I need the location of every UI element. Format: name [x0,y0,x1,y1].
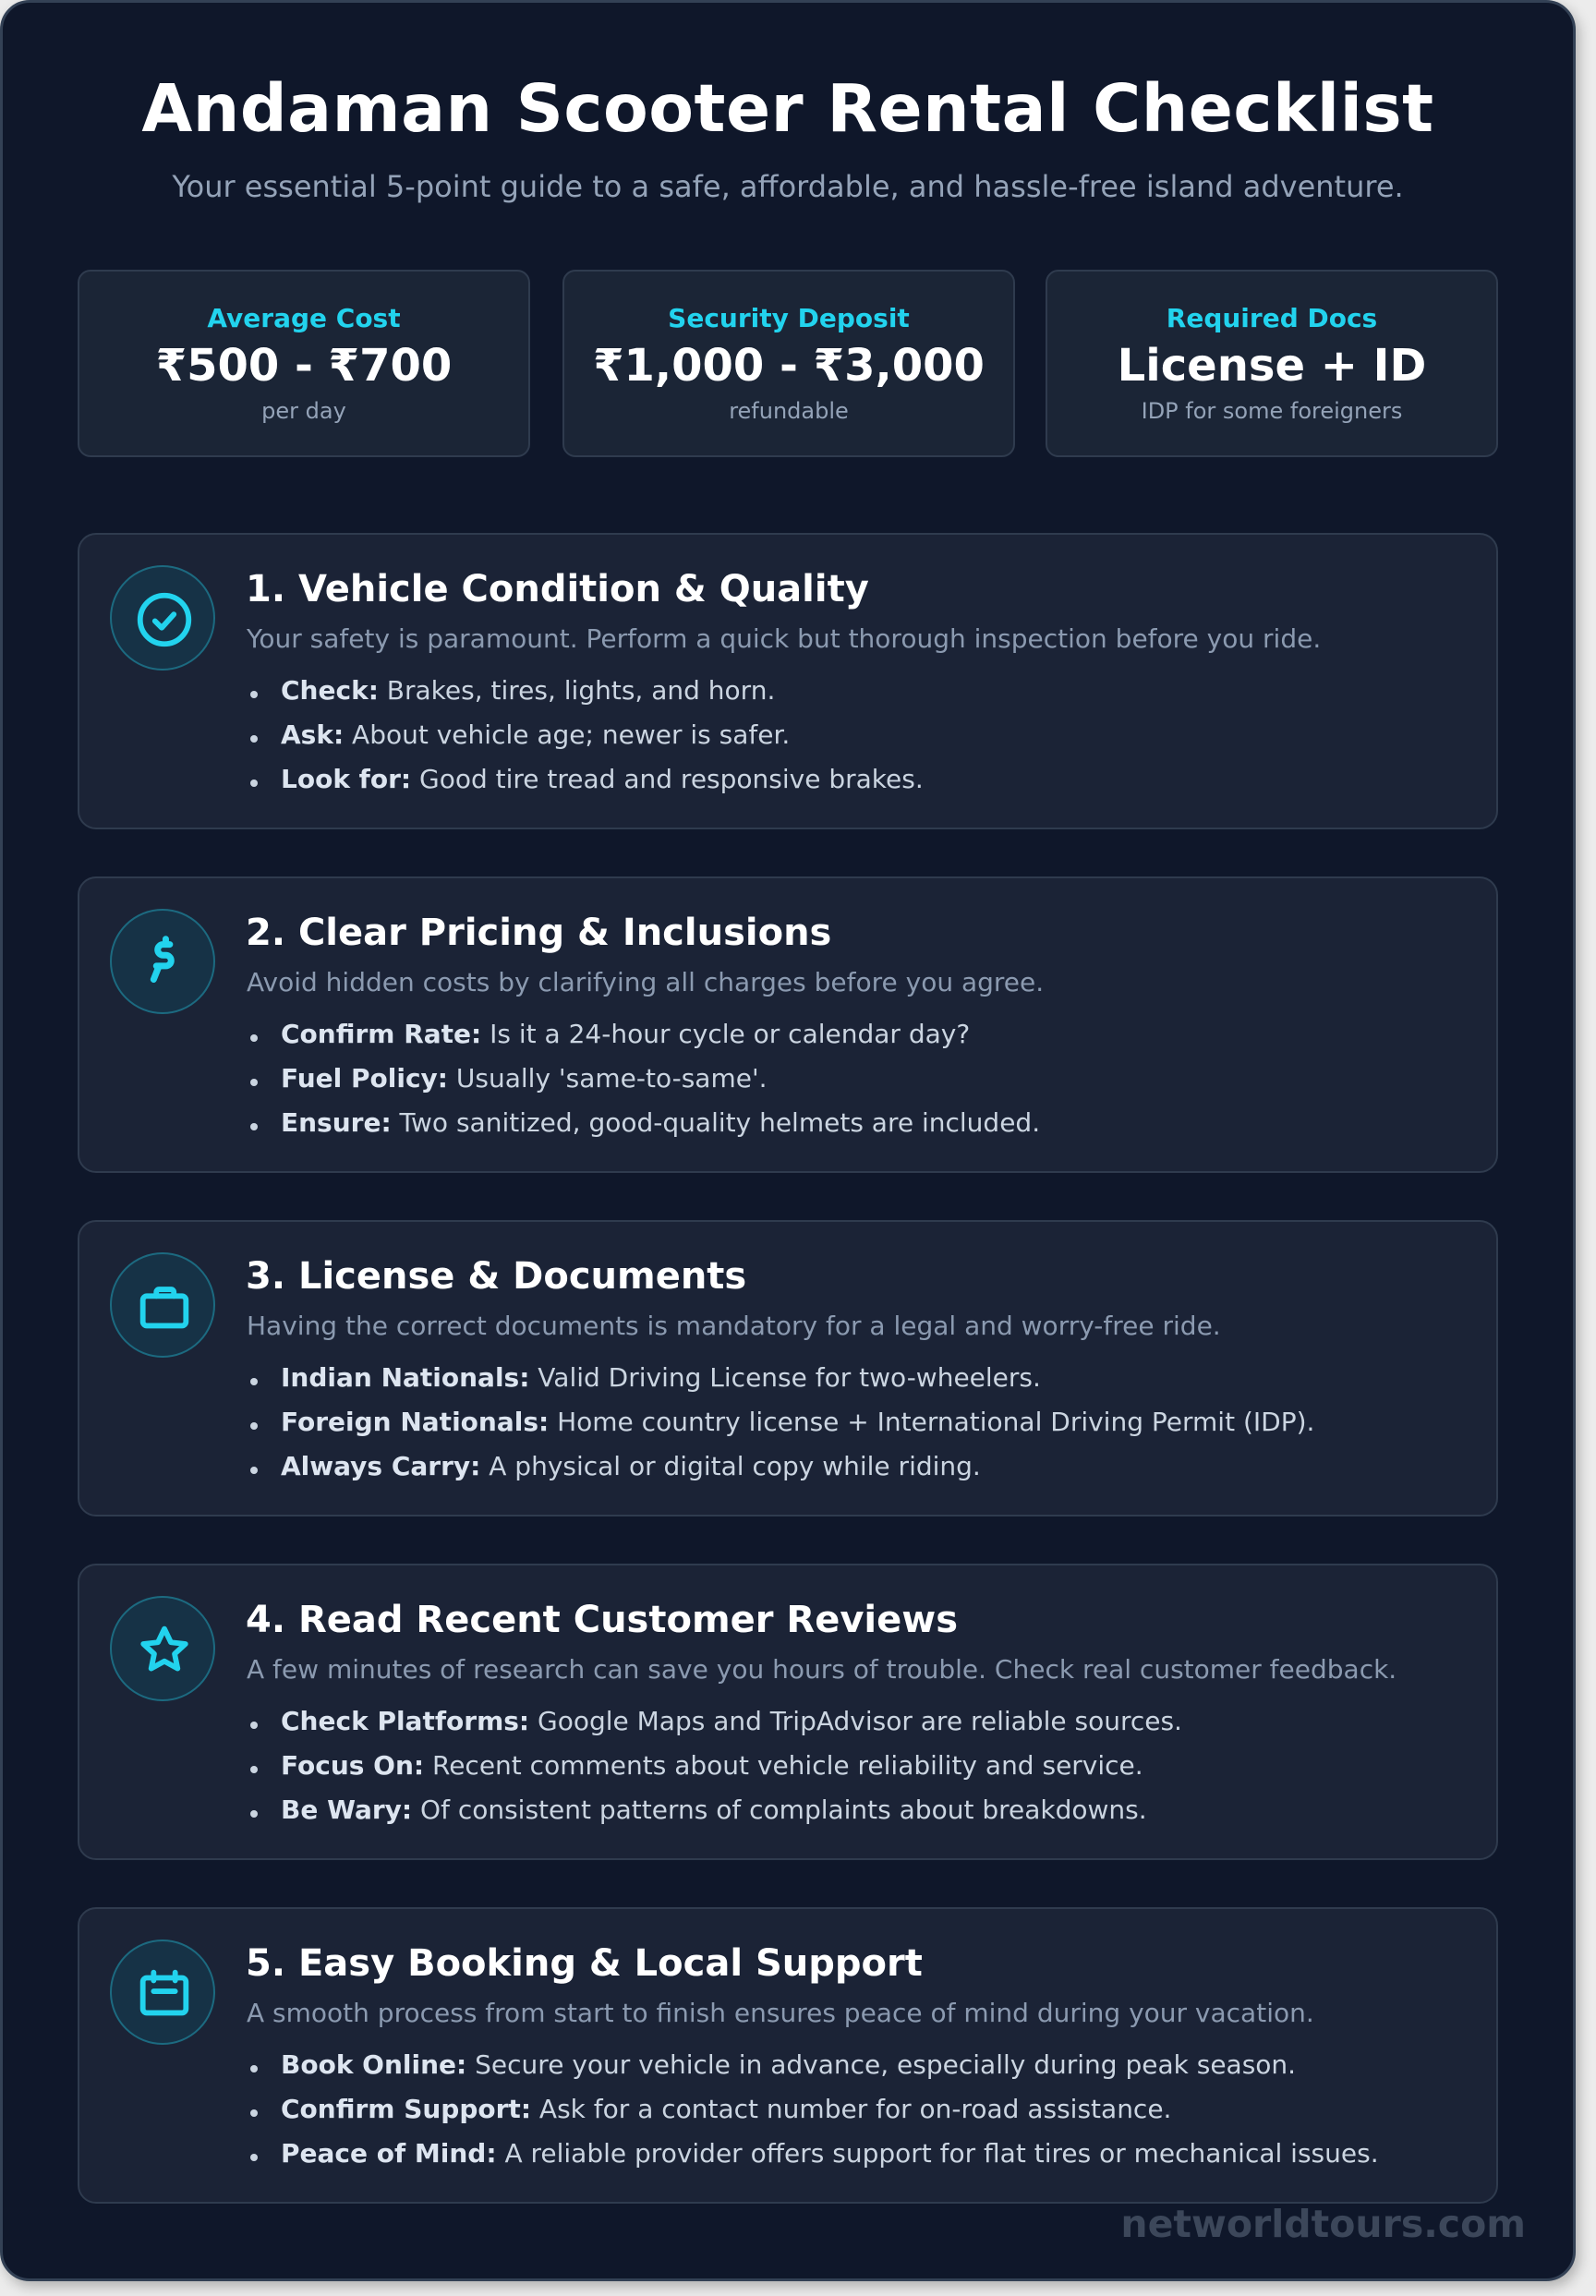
description: Your safety is paramount. Perform a quick but thorough inspection before you ride. [247,623,1321,654]
heading: 3. License & Documents [246,1255,746,1298]
stat card: required docs [1046,270,1498,457]
bullet list: Foreign Nationals: Home country license + International Driving Permit (IDP). [281,1407,1314,1437]
icon: briefcase [110,1252,215,1358]
bullet list: Book Online: Secure your vehicle in advance, especially during peak season. [281,2049,1296,2080]
bullet list: Peace of Mind: A reliable provider offers support for flat tires or mechanical issues. [281,2138,1379,2169]
footer brand: networldtours.com [1120,2202,1526,2246]
heading: 1. Vehicle Condition & Quality [246,568,869,610]
icon: star [110,1596,215,1701]
stat card: security deposit: Security Deposit [668,303,910,333]
bullet list [250,1019,1040,1138]
bullet list: Look for: Good tire tread and responsive brakes. [281,764,924,794]
stat card: security deposit: refundable [729,398,849,424]
panel: pricing [78,876,1498,1173]
stat card: required docs: Required Docs [1167,303,1377,333]
icon: dollar [110,909,215,1014]
panel: booking [78,1907,1498,2204]
bullet list [250,675,924,794]
description: A few minutes of research can save you hours of trouble. Check real customer feedback. [247,1654,1396,1685]
heading: 2. Clear Pricing & Inclusions [246,912,831,954]
bullet list: Confirm Support: Ask for a contact number for on-road assistance. [281,2094,1171,2124]
stat card: average cost: per day [261,398,346,424]
description: A smooth process from start to finish ensures peace of mind during your vacation. [247,1998,1314,2028]
heading: 4. Read Recent Customer Reviews [246,1599,958,1641]
panel: vehicle condition [78,533,1498,829]
stat card: security deposit [562,270,1015,457]
bullet list: Focus On: Recent comments about vehicle reliability and service. [281,1750,1143,1781]
stat card: average cost [78,270,530,457]
bullet list: Confirm Rate: Is it a 24-hour cycle or calendar day? [281,1019,970,1049]
bullet list: Check Platforms: Google Maps and TripAdvisor are reliable sources. [281,1706,1182,1736]
bullet list [250,1706,1182,1825]
bullet list: Be Wary: Of consistent patterns of complaints about breakdowns. [281,1795,1147,1825]
bullet list [250,1362,1314,1481]
bullet list: Ensure: Two sanitized, good-quality helmets are included. [281,1107,1040,1138]
description: Having the correct documents is mandatory for a legal and worry-free ride. [247,1311,1221,1341]
stat card: required docs: IDP for some foreigners [1142,398,1402,424]
bullet list: Fuel Policy: Usually 'same-to-same'. [281,1063,768,1094]
bullet list [250,2049,1379,2169]
icon: calendar [110,1940,215,2045]
stat card: security deposit: ₹1,000 - ₹3,000 [593,340,985,392]
icon: check circle [110,565,215,671]
stat card: average cost: ₹500 - ₹700 [156,340,452,392]
title: Andaman Scooter Rental Checklist [141,70,1434,147]
panel: reviews [78,1564,1498,1860]
bullet list: Check: Brakes, tires, lights, and horn. [281,675,775,706]
bullet list: Indian Nationals: Valid Driving License for two-wheelers. [281,1362,1041,1393]
bullet list: Ask: About vehicle age; newer is safer. [281,719,790,750]
description: Avoid hidden costs by clarifying all charges before you agree. [247,967,1044,997]
stat card: required docs: License + ID [1118,340,1426,392]
bullet list: Always Carry: A physical or digital copy while riding. [281,1451,981,1481]
stat card: average cost: Average Cost [207,303,401,333]
subtitle: Your essential 5-point guide to a safe, affordable, and hassle-free island adventure. [172,169,1404,204]
heading: 5. Easy Booking & Local Support [246,1942,923,1985]
panel: license [78,1220,1498,1517]
